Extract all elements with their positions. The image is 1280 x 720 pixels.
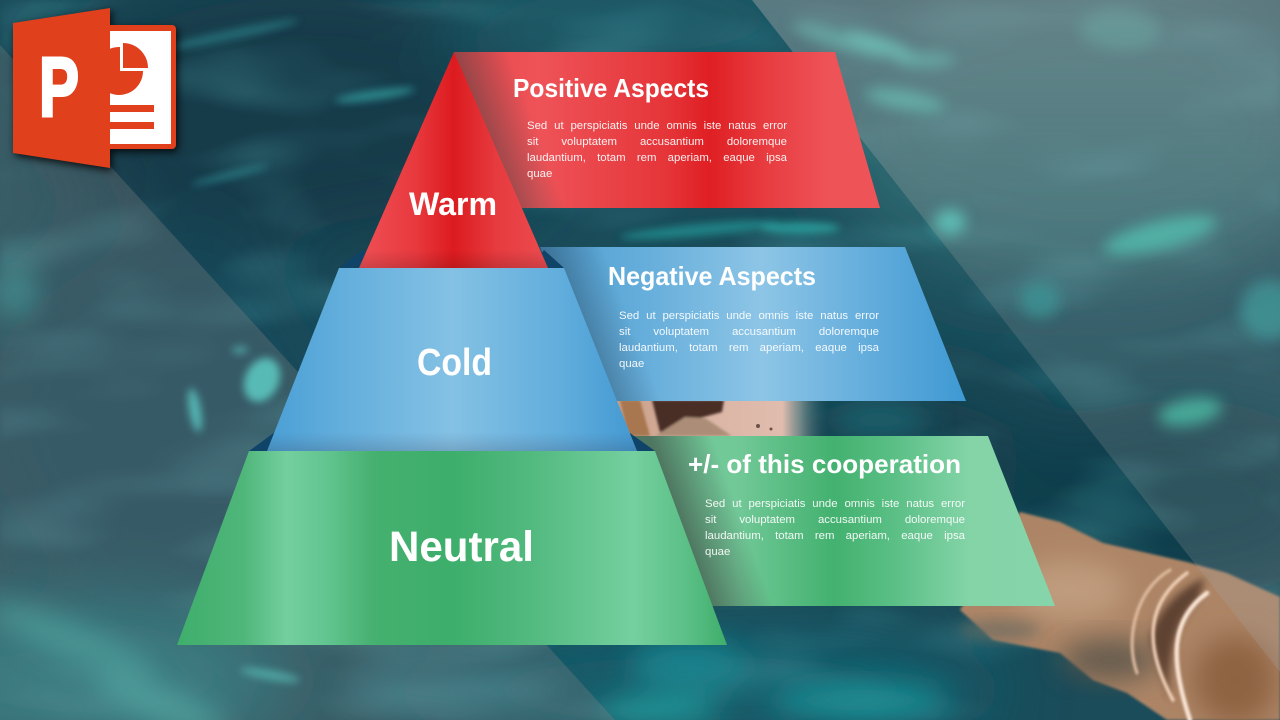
fold wedges behind tiers bbox=[249, 250, 655, 451]
icon: PowerPoint logo bbox=[10, 8, 183, 175]
text block: cooperation description: quae bbox=[705, 546, 730, 558]
heading: Positive Aspects: Positive Aspects bbox=[513, 73, 709, 103]
text block: Negative Aspects description bbox=[619, 310, 879, 370]
panel: +/- of this cooperation bbox=[634, 436, 1055, 606]
text block: Positive Aspects description: laudantium, totam rem aperiam, eaque ipsa bbox=[527, 152, 787, 164]
arm bbox=[960, 512, 1280, 720]
text block: Negative Aspects description: Sed ut perspiciatis unde omnis iste natus error bbox=[619, 310, 879, 322]
text block: Positive Aspects description: sit voluptatem accusantium doloremque bbox=[527, 136, 787, 148]
text block: Negative Aspects description: laudantium, totam rem aperiam, eaque ipsa bbox=[619, 342, 879, 354]
panel: Positive Aspects bbox=[454, 52, 880, 208]
pyramid bbox=[177, 52, 727, 645]
shell and skin patch bbox=[615, 400, 830, 440]
tier: Warm: Warm bbox=[409, 186, 497, 222]
tier: Neutral: Neutral bbox=[389, 523, 534, 571]
icon: PowerPoint logo: P bbox=[39, 40, 79, 134]
text block: Negative Aspects description: quae bbox=[619, 358, 644, 370]
tier: Cold bbox=[267, 268, 637, 451]
text block: cooperation description: laudantium, totam rem aperiam, eaque ipsa bbox=[705, 530, 965, 542]
text block: Negative Aspects description: sit voluptatem accusantium doloremque bbox=[619, 326, 879, 338]
heading: +/- of this cooperation: +/- of this cooperation bbox=[688, 449, 961, 479]
light diagonal overlay: left bbox=[0, 45, 615, 720]
tier: Warm bbox=[359, 52, 548, 268]
tier: Neutral bbox=[177, 451, 727, 645]
panel: Negative Aspects bbox=[540, 247, 966, 401]
text block: Positive Aspects description bbox=[527, 120, 787, 180]
light diagonal overlay: right bbox=[752, 0, 1280, 672]
text block: cooperation description: Sed ut perspiciatis unde omnis iste natus error bbox=[705, 498, 965, 510]
text block: Positive Aspects description: Sed ut perspiciatis unde omnis iste natus error bbox=[527, 120, 787, 132]
tier: Cold: Cold bbox=[417, 342, 492, 384]
heading: Negative Aspects: Negative Aspects bbox=[608, 261, 816, 291]
text block: cooperation description: sit voluptatem accusantium doloremque bbox=[705, 514, 965, 526]
text block: cooperation description bbox=[705, 498, 965, 558]
text block: Positive Aspects description: quae bbox=[527, 168, 552, 180]
